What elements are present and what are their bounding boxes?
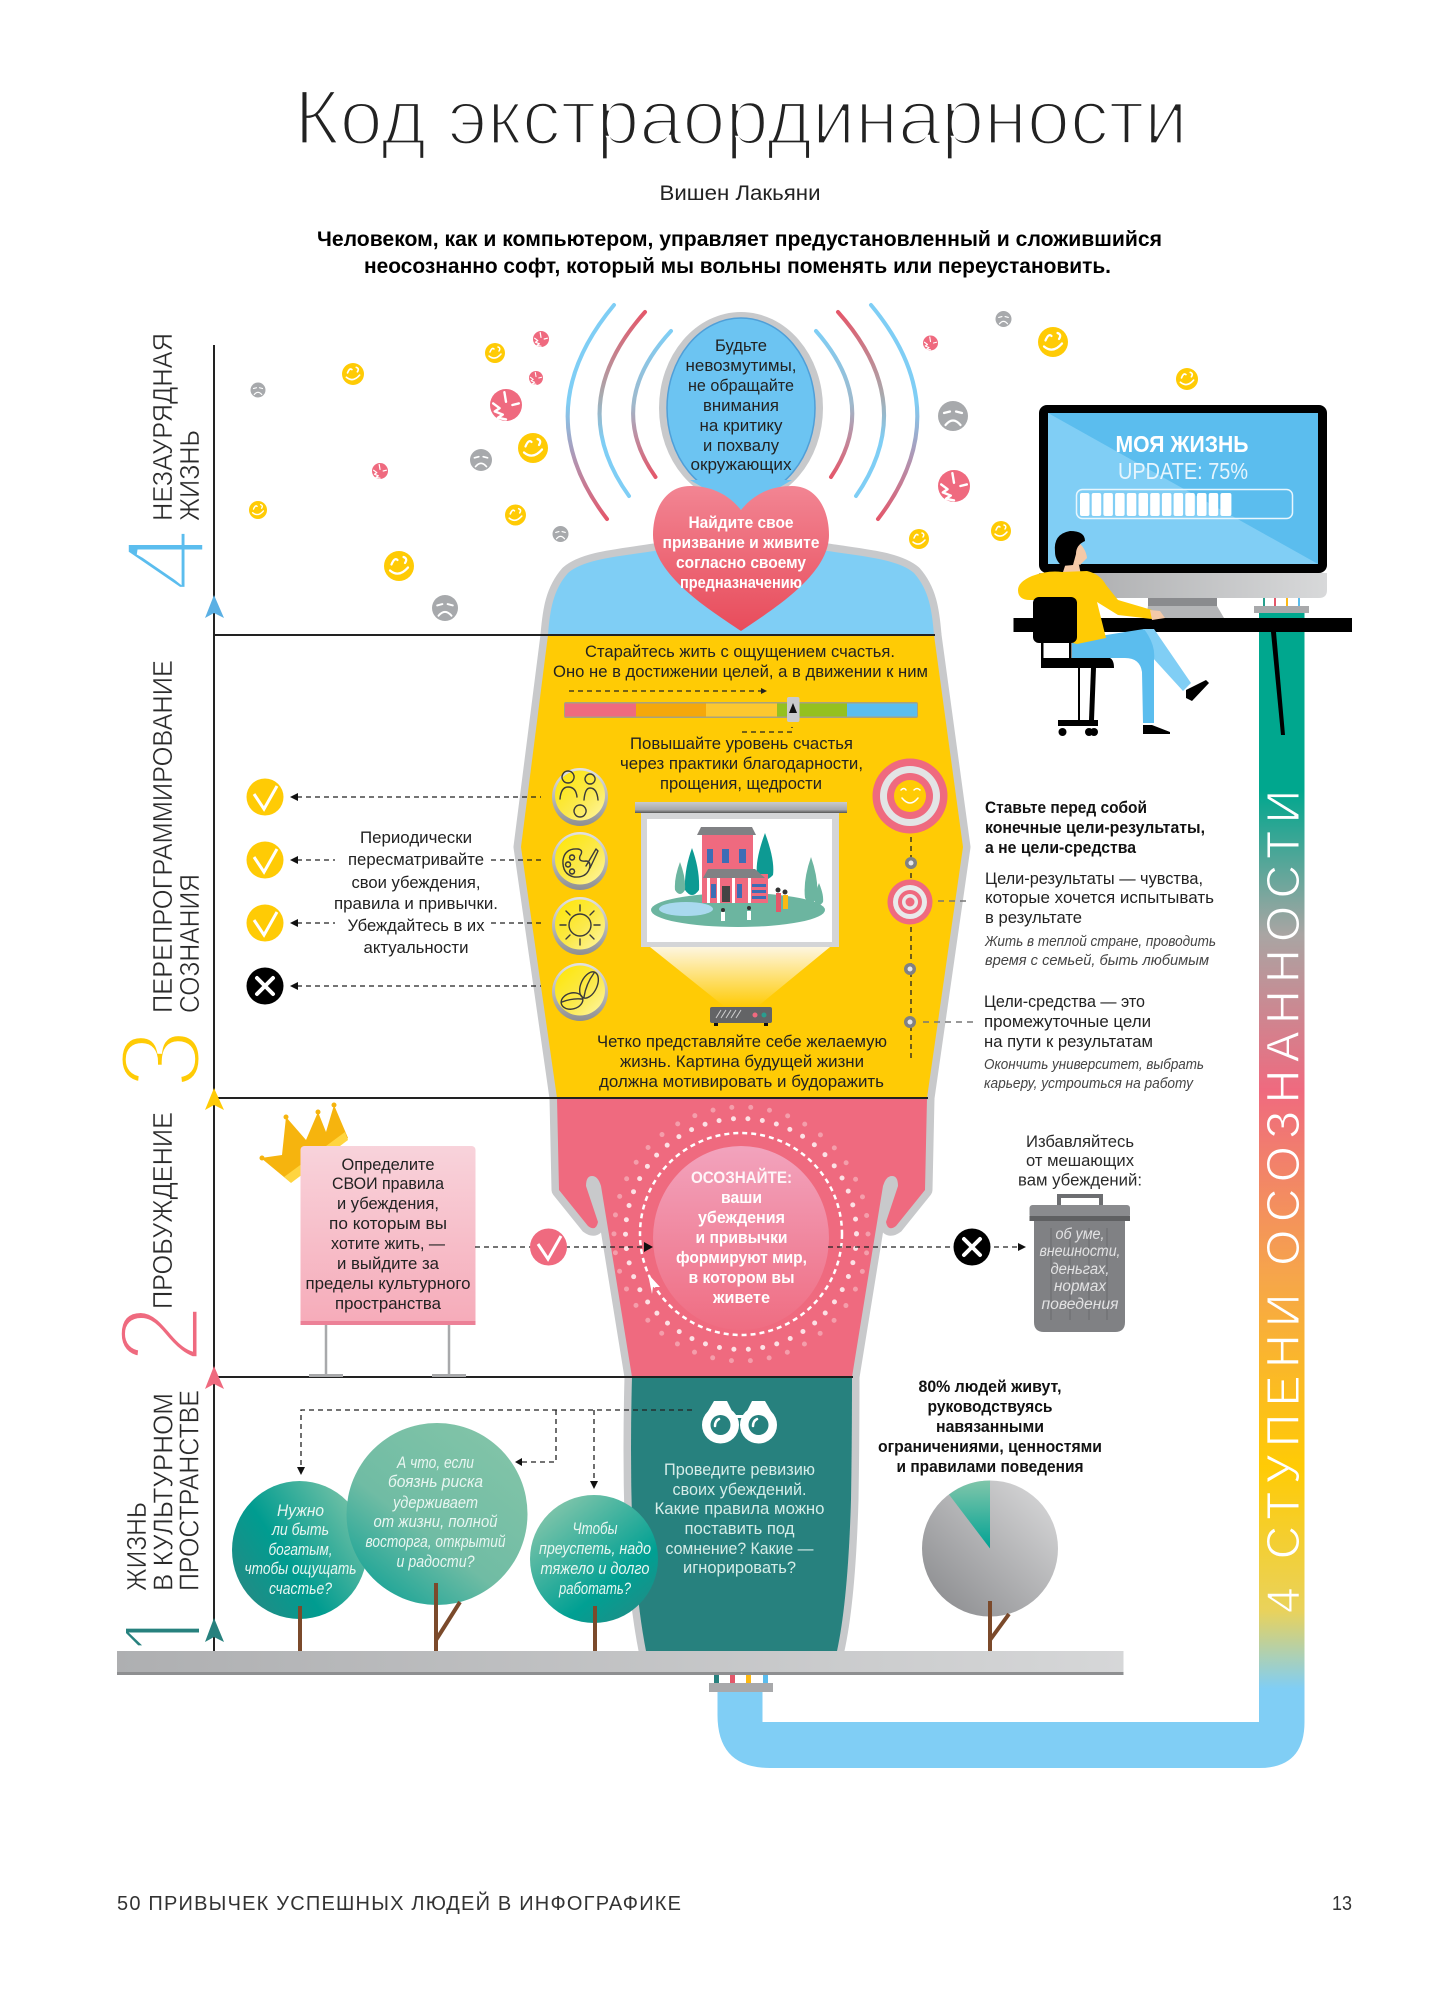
goals text: которые хочется испытывать — [985, 888, 1214, 907]
vision text: должна мотивировать и будоражить — [599, 1072, 884, 1091]
section lines over body — [540, 635, 935, 1377]
ground bar — [117, 1651, 1124, 1675]
revision text: сомнение? Какие — — [666, 1539, 814, 1558]
tree: success question: Чтобы — [572, 1519, 618, 1538]
projector screen — [635, 802, 847, 1007]
review text: свои убеждения, — [352, 873, 480, 892]
billboard with crown: и убеждения, — [337, 1194, 439, 1213]
icon: trash can: об уме, — [1056, 1226, 1104, 1243]
heart callout: призвание и живите — [662, 534, 820, 552]
goals text: Цели-средства — это — [984, 992, 1145, 1011]
person — [1018, 531, 1209, 736]
revision text: своих убеждений. — [672, 1480, 806, 1499]
happiness text: Оно не в достижении целей, а в движении к ним — [553, 662, 928, 681]
tree: success question: работать? — [558, 1579, 631, 1598]
statistic text — [878, 1377, 1102, 1476]
icon: trash can: поведения — [1042, 1296, 1118, 1313]
icon: crown — [260, 1102, 348, 1183]
awareness circle: ОСОЗНАЙТЕ: — [691, 1168, 792, 1187]
level 3 label: 3 — [98, 1029, 225, 1089]
vision text — [597, 1032, 887, 1091]
page number: 13 — [1332, 1893, 1352, 1915]
head with advice: окружающих — [690, 455, 792, 474]
pie tree chart — [922, 1480, 1058, 1651]
tree: wealth question: счастье? — [269, 1579, 332, 1598]
arrows through awareness — [475, 1242, 1026, 1252]
heart callout: Найдите свое — [688, 514, 794, 532]
goals text: промежуточные цели — [984, 1012, 1151, 1031]
tree: wealth question: богатым, — [268, 1540, 332, 1559]
statistic text: руководствуясь — [928, 1397, 1052, 1416]
level 1 label — [126, 1391, 199, 1646]
review text: пересматривайте — [348, 850, 484, 869]
revision text: поставить под — [684, 1519, 795, 1538]
sound arcs around head — [568, 305, 917, 519]
infographic canvas — [117, 92, 1352, 1914]
level 4 label: НЕЗАУРЯДНАЯ — [147, 333, 178, 521]
question routes — [297, 1410, 692, 1489]
desk — [1014, 618, 1352, 735]
tree: wealth question: чтобы ощущать — [244, 1559, 356, 1578]
icon: check — [246, 778, 284, 816]
awareness circle: и привычки — [696, 1229, 788, 1247]
head with advice: не обращайте — [688, 376, 794, 395]
revision text: Проведите ревизию — [664, 1460, 815, 1479]
heart callout: предназначению — [680, 574, 802, 592]
tree: risk question: и радости? — [396, 1552, 475, 1571]
happiness scale — [564, 688, 918, 732]
data pipe: 4 steps of awareness — [718, 613, 1309, 1768]
tree: risk question: восторга, открытий — [366, 1532, 506, 1551]
heart callout — [653, 486, 829, 631]
review text: Убеждайтесь в их — [348, 916, 485, 935]
computer desk with person — [1014, 405, 1352, 736]
icon: trash can: нормах — [1054, 1278, 1107, 1295]
level 2 label — [97, 1112, 224, 1364]
statistic text: ограничениями, ценностями — [878, 1437, 1102, 1456]
emotional noise: emoji cloud — [249, 311, 1198, 621]
bottom connector — [709, 1675, 773, 1692]
panel: pink section — [557, 1098, 927, 1377]
icon: trash can — [1030, 1196, 1130, 1332]
icon: binoculars — [702, 1401, 777, 1444]
tree: success question: преуспеть, надо — [539, 1539, 651, 1558]
review text: актуальности — [364, 938, 468, 957]
monitor — [1039, 405, 1327, 618]
icon: trash can: деньгах, — [1050, 1261, 1110, 1278]
vision text: жизнь. Картина будущей жизни — [620, 1052, 864, 1071]
goals text: а не цели-средства — [985, 838, 1137, 857]
billboard with crown: пределы культурного — [306, 1274, 470, 1293]
icon: coffee beans — [552, 963, 608, 1021]
icon: family — [552, 768, 608, 826]
tree: risk question: боязнь риска — [388, 1472, 483, 1491]
level 2 label: 2 — [97, 1304, 224, 1364]
goals text: на пути к результатам — [984, 1032, 1153, 1051]
billboard with crown: СВОИ правила — [332, 1174, 445, 1193]
level 4 label: 4 — [103, 528, 230, 592]
level 4 label: ЖИЗНЬ — [174, 430, 205, 521]
head with advice: внимания — [703, 396, 779, 415]
tree: risk question — [346, 1423, 528, 1651]
icon: sun — [552, 897, 608, 955]
gratitude text: через практики благодарности, — [620, 754, 863, 773]
trash label: вам убеждений: — [1018, 1170, 1142, 1190]
level 4 label — [103, 333, 230, 592]
tree: wealth question — [232, 1481, 367, 1651]
review text: Периодически — [360, 828, 472, 847]
mid target — [888, 880, 932, 924]
level 3 label: ПЕРЕПРОГРАММИРОВАНИЕ — [147, 660, 178, 1013]
head with advice: на критику — [700, 416, 783, 435]
heart callout: согласно своему — [676, 554, 807, 572]
author: Вишен Лакьяни — [660, 182, 820, 205]
trash label — [1018, 1132, 1142, 1190]
chair — [1033, 597, 1114, 736]
slider — [787, 697, 800, 722]
statistic text: навязанными — [936, 1417, 1044, 1436]
tree: risk question: А что, если — [396, 1453, 474, 1472]
panel: teal legs — [631, 1377, 852, 1651]
trash label: Избавляйтесь — [1026, 1132, 1134, 1151]
tree: wealth question: ли быть — [271, 1520, 329, 1539]
panel: shoulders — [548, 550, 934, 635]
review text — [334, 828, 498, 957]
goals text: в результате — [985, 908, 1082, 927]
goals text: время с семьей, быть любимым — [985, 952, 1209, 969]
level 1 label: 1 — [98, 1609, 232, 1655]
icon: check — [246, 842, 284, 878]
statistic text: и правилами поведения — [896, 1457, 1084, 1476]
monitor: МОЯ ЖИЗНЬ — [1116, 431, 1248, 457]
head with advice — [659, 312, 823, 510]
goals text: Жить в теплой стране, проводить — [984, 933, 1216, 950]
gratitude text: прощения, щедрости — [660, 774, 822, 793]
icon: pink check — [530, 1228, 567, 1266]
awareness circle: ваши — [721, 1189, 762, 1207]
footer: 50 ПРИВЫЧЕК УСПЕШНЫХ ЛЮДЕЙ В ИНФОГРАФИКЕ — [117, 1891, 681, 1915]
vertical axis with level lines — [205, 345, 935, 1651]
billboard with crown: по которым вы — [329, 1214, 447, 1233]
goals text — [984, 798, 1216, 1092]
tree: success question: тяжело и долго — [540, 1559, 650, 1578]
subtitle: Человеком, как и компьютером, управляет предустановленный и сложившийся — [317, 228, 1162, 251]
billboard with crown — [260, 1102, 476, 1377]
tree: risk question: от жизни, полной — [374, 1512, 498, 1531]
awareness circle: в котором вы — [688, 1269, 794, 1287]
subtitle — [317, 228, 1162, 278]
subtitle: неосознанно софт, который мы вольны поменять или переустановить. — [364, 255, 1111, 278]
tree: risk question: удерживает — [392, 1493, 478, 1512]
awareness circle: формируют мир, — [676, 1249, 807, 1267]
review text: правила и привычки. — [334, 894, 498, 913]
head with advice: невозмутимы, — [686, 356, 796, 375]
level 1 label: ПРОСТРАНСТВЕ — [174, 1390, 204, 1591]
goals text: Цели-результаты — чувства, — [985, 869, 1203, 888]
review arrows — [290, 793, 541, 990]
billboard with crown: Определите — [342, 1155, 434, 1174]
level 1 label: В КУЛЬТУРНОМ — [148, 1393, 178, 1591]
wires and connector — [1254, 598, 1309, 613]
tree: success question — [530, 1495, 658, 1651]
goal path — [872, 758, 973, 1058]
revision text: Какие правила можно — [654, 1499, 824, 1518]
vision text: Четко представляйте себе желаемую — [597, 1032, 887, 1051]
billboard with crown: хотите жить, — — [331, 1234, 445, 1253]
projector — [710, 1007, 772, 1026]
awareness circle: убеждения — [698, 1209, 785, 1227]
happiness text — [553, 642, 928, 681]
house illustration — [651, 827, 825, 927]
tree: wealth question: Нужно — [277, 1501, 324, 1520]
level 1 label: ЖИЗНЬ — [121, 1502, 152, 1591]
gratitude text: Повышайте уровень счастья — [630, 734, 853, 753]
monitor: UPDATE: 75% — [1118, 458, 1248, 484]
goals text: конечные цели-результаты, — [985, 818, 1205, 837]
body outline — [521, 550, 963, 1650]
title: Код экстраординарности — [294, 73, 1188, 161]
revision text — [654, 1460, 824, 1577]
level 3 label: СОЗНАНИЯ — [174, 874, 205, 1013]
icon: trash can: внешности, — [1040, 1243, 1120, 1260]
trash label: от мешающих — [1026, 1151, 1134, 1170]
icon: check — [246, 904, 284, 942]
goals text: Окончить университет, выбрать — [984, 1056, 1204, 1073]
statistic text: 80% людей живут, — [918, 1377, 1062, 1396]
gratitude text — [620, 734, 863, 793]
goals text: Ставьте перед собой — [985, 798, 1147, 817]
awareness circle — [614, 1107, 868, 1361]
column label: 4 СТУПЕНИ ОСОЗНАННОСТИ — [1257, 790, 1309, 1613]
icon: black cross — [954, 1228, 990, 1266]
revision text: игнорировать? — [683, 1558, 796, 1577]
billboard with crown: и выйдите за — [337, 1254, 440, 1273]
final target with smile — [872, 758, 948, 834]
panel: yellow torso — [521, 635, 963, 1098]
awareness circle: живете — [712, 1289, 770, 1307]
icon: palette — [552, 832, 608, 890]
head with advice: Будьте — [715, 336, 767, 355]
billboard with crown: пространства — [335, 1294, 442, 1313]
happiness text: Старайтесь жить с ощущением счастья. — [585, 642, 895, 661]
goals text: карьеру, устроиться на работу — [984, 1075, 1194, 1092]
level 2 label: ПРОБУЖДЕНИЕ — [147, 1112, 178, 1309]
head with advice: и похвалу — [703, 436, 779, 455]
level 3 label — [98, 660, 225, 1089]
icon: cross — [246, 968, 284, 1004]
